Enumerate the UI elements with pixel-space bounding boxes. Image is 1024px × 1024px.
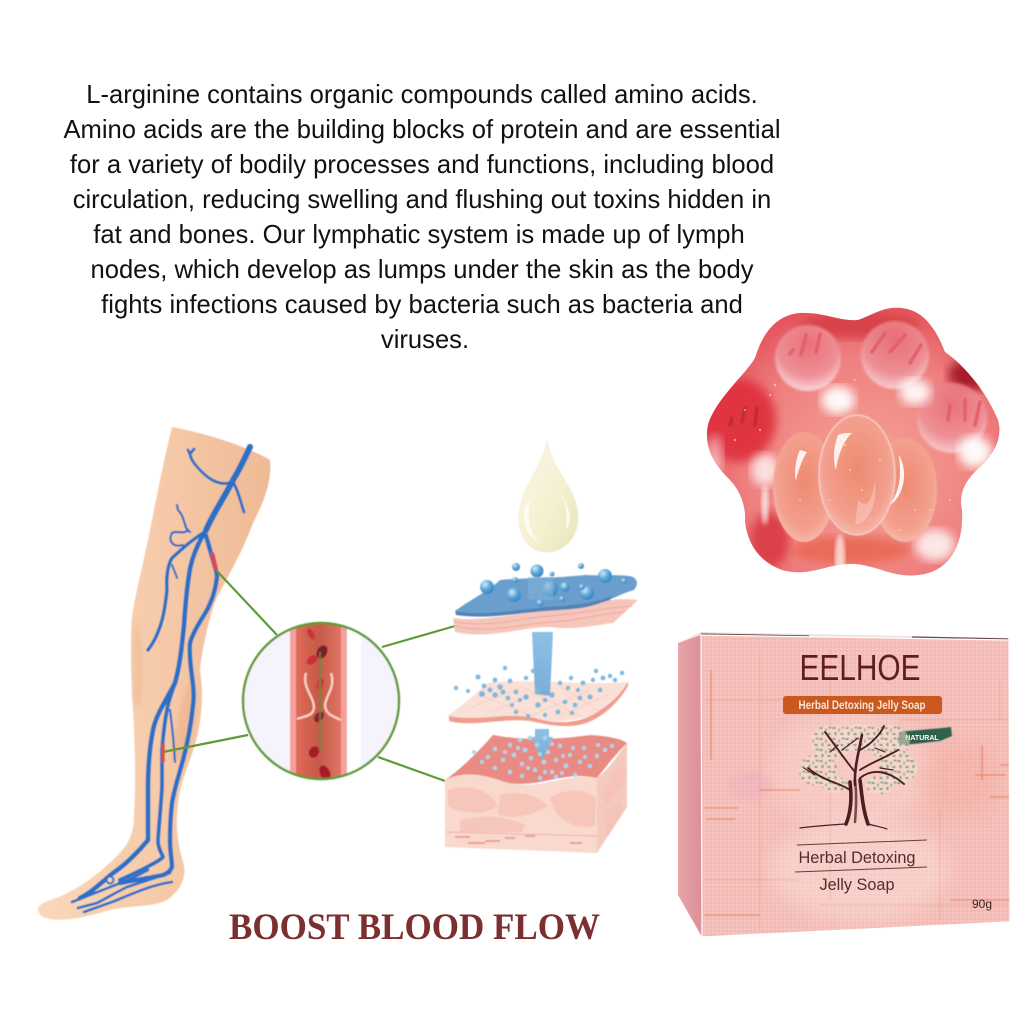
skin shading: [172, 680, 195, 760]
water bubbles on top layer: [480, 563, 627, 606]
toe pads: [775, 321, 987, 453]
brand name: EELHOE: [800, 647, 920, 688]
toe marks: [790, 333, 980, 425]
veins: [72, 447, 250, 912]
product name: Herbal Detoxing: [798, 849, 916, 867]
dark red edges: [700, 378, 776, 462]
soap body: [707, 308, 999, 575]
white glow areas: [821, 386, 855, 414]
product box: [678, 632, 1010, 937]
arrow square on top layer: [528, 577, 553, 600]
middle layer bubbles: [454, 666, 624, 718]
product name: Jelly Soap: [820, 876, 894, 894]
connector lines: [163, 570, 455, 781]
foliage: [799, 724, 917, 794]
box texture streaks: [705, 650, 1009, 930]
text block: L-arginine description: circulation, reducing swelling and flushing out toxins hidden in: [73, 186, 771, 214]
trunk and branches: [800, 726, 904, 829]
blue highlight band: [455, 596, 612, 617]
leg illustration with veins: [38, 427, 270, 920]
text block: L-arginine description: fights infections caused by bacteria such as bacteria and: [101, 291, 743, 319]
pointer line inside vein: [319, 652, 321, 752]
caption: boost blood flow: BOOST BLOOD FLOW: [229, 907, 600, 948]
text block: L-arginine description: [63, 81, 781, 354]
red vein marks: [212, 553, 216, 570]
magnified vein circle: [243, 620, 399, 782]
box left side: [678, 635, 702, 937]
product name: [795, 840, 927, 894]
main pads: [773, 415, 937, 542]
tree illustration: [799, 724, 917, 829]
top layer: blue surface: [455, 575, 637, 613]
valve: [297, 673, 314, 719]
blood cells: [306, 628, 332, 778]
leg silhouette: [38, 427, 270, 920]
bottom block: top surface: [445, 735, 627, 784]
icon: cream drop: [519, 441, 578, 552]
box top edge: [678, 632, 1010, 643]
pad highlights: [834, 433, 852, 470]
weight: 90g: [972, 897, 992, 911]
arrow head: [531, 729, 553, 760]
box front face: [701, 635, 1010, 937]
middle layer: [447, 681, 628, 721]
bottom block: side face: [597, 743, 627, 853]
natural badge: NATURAL: [905, 735, 939, 742]
paw shaped jelly soap: [700, 308, 999, 582]
orange label: Herbal Detoxing Jelly Soap: [798, 700, 926, 712]
text block: L-arginine description: for a variety of bodily processes and functions, including blood: [70, 151, 774, 179]
text block: L-arginine description: L-arginine contains organic compounds called amino acids.: [86, 81, 758, 109]
skin layers diagram: [445, 563, 638, 853]
top layer: pink band: [453, 599, 638, 634]
orange label: [783, 696, 942, 714]
natural badge: [898, 727, 952, 745]
vessel walls: [290, 620, 347, 782]
tissue cells: [448, 765, 625, 838]
text block: L-arginine description: viruses.: [381, 326, 469, 354]
sparkles: [734, 379, 951, 531]
text block: L-arginine description: nodes, which develop as lumps under the skin as the body: [90, 256, 754, 284]
text block: L-arginine description: Amino acids are the building blocks of protein and are essential: [63, 116, 781, 144]
bottom block bubbles: [472, 736, 614, 780]
bottom block: front face: [445, 774, 597, 853]
text block: L-arginine description: fat and bones. Our lymphatic system is made up of lymph: [93, 221, 745, 249]
arrow shaft: [532, 632, 553, 696]
